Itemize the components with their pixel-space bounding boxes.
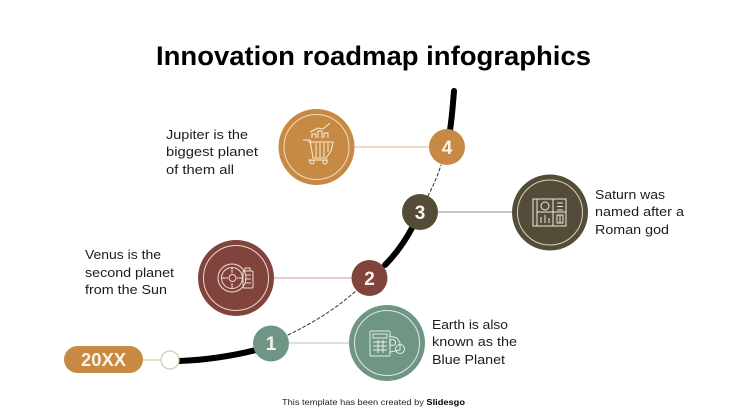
- text: Saturn: Saturn was: [595, 187, 666, 202]
- text: Saturn: Roman god: [595, 222, 669, 237]
- node 2: 2: [364, 269, 375, 290]
- node 2: [352, 260, 388, 296]
- start marker: 20XX: [64, 346, 179, 373]
- step 2: Venus: [85, 240, 388, 316]
- node 3: 3: [415, 203, 425, 224]
- step 3: Saturn: [402, 174, 685, 250]
- step 4: Jupiter: [166, 109, 465, 185]
- text: Saturn: [595, 187, 685, 237]
- text: Venus: [85, 247, 174, 297]
- node 4: 4: [442, 138, 453, 159]
- text: Earth: Earth is also: [432, 317, 508, 332]
- icon circle: calculator: [349, 305, 425, 381]
- icon circle: shopping cart: [278, 109, 354, 185]
- step 1: Earth: [253, 305, 517, 381]
- node 4: [429, 129, 465, 165]
- node 1: 1: [266, 334, 277, 355]
- title: Innovation roadmap infographics: [156, 41, 591, 71]
- roadmap path: [179, 91, 454, 361]
- text: Jupiter: biggest planet: [166, 144, 258, 159]
- text: Earth: [432, 317, 517, 367]
- text: Venus: from the Sun: [85, 282, 167, 297]
- icon circle: dashboard: [512, 174, 588, 250]
- icon circle: gauge: [198, 240, 274, 316]
- text: Earth: known as the: [432, 334, 517, 349]
- text: Jupiter: Jupiter is the: [166, 127, 248, 142]
- text: Earth: Blue Planet: [432, 352, 505, 367]
- text: Saturn: named after a: [595, 204, 685, 219]
- text: Jupiter: of them all: [166, 162, 234, 177]
- node 1: [253, 326, 289, 362]
- node 3: [402, 194, 438, 230]
- text: Venus: Venus is the: [85, 247, 161, 262]
- text: Venus: second planet: [85, 265, 174, 280]
- footer credit: This template has been created by Slidesgo: [282, 397, 465, 407]
- start marker: 20XX: 20XX: [81, 350, 126, 370]
- text: Jupiter: [166, 127, 258, 177]
